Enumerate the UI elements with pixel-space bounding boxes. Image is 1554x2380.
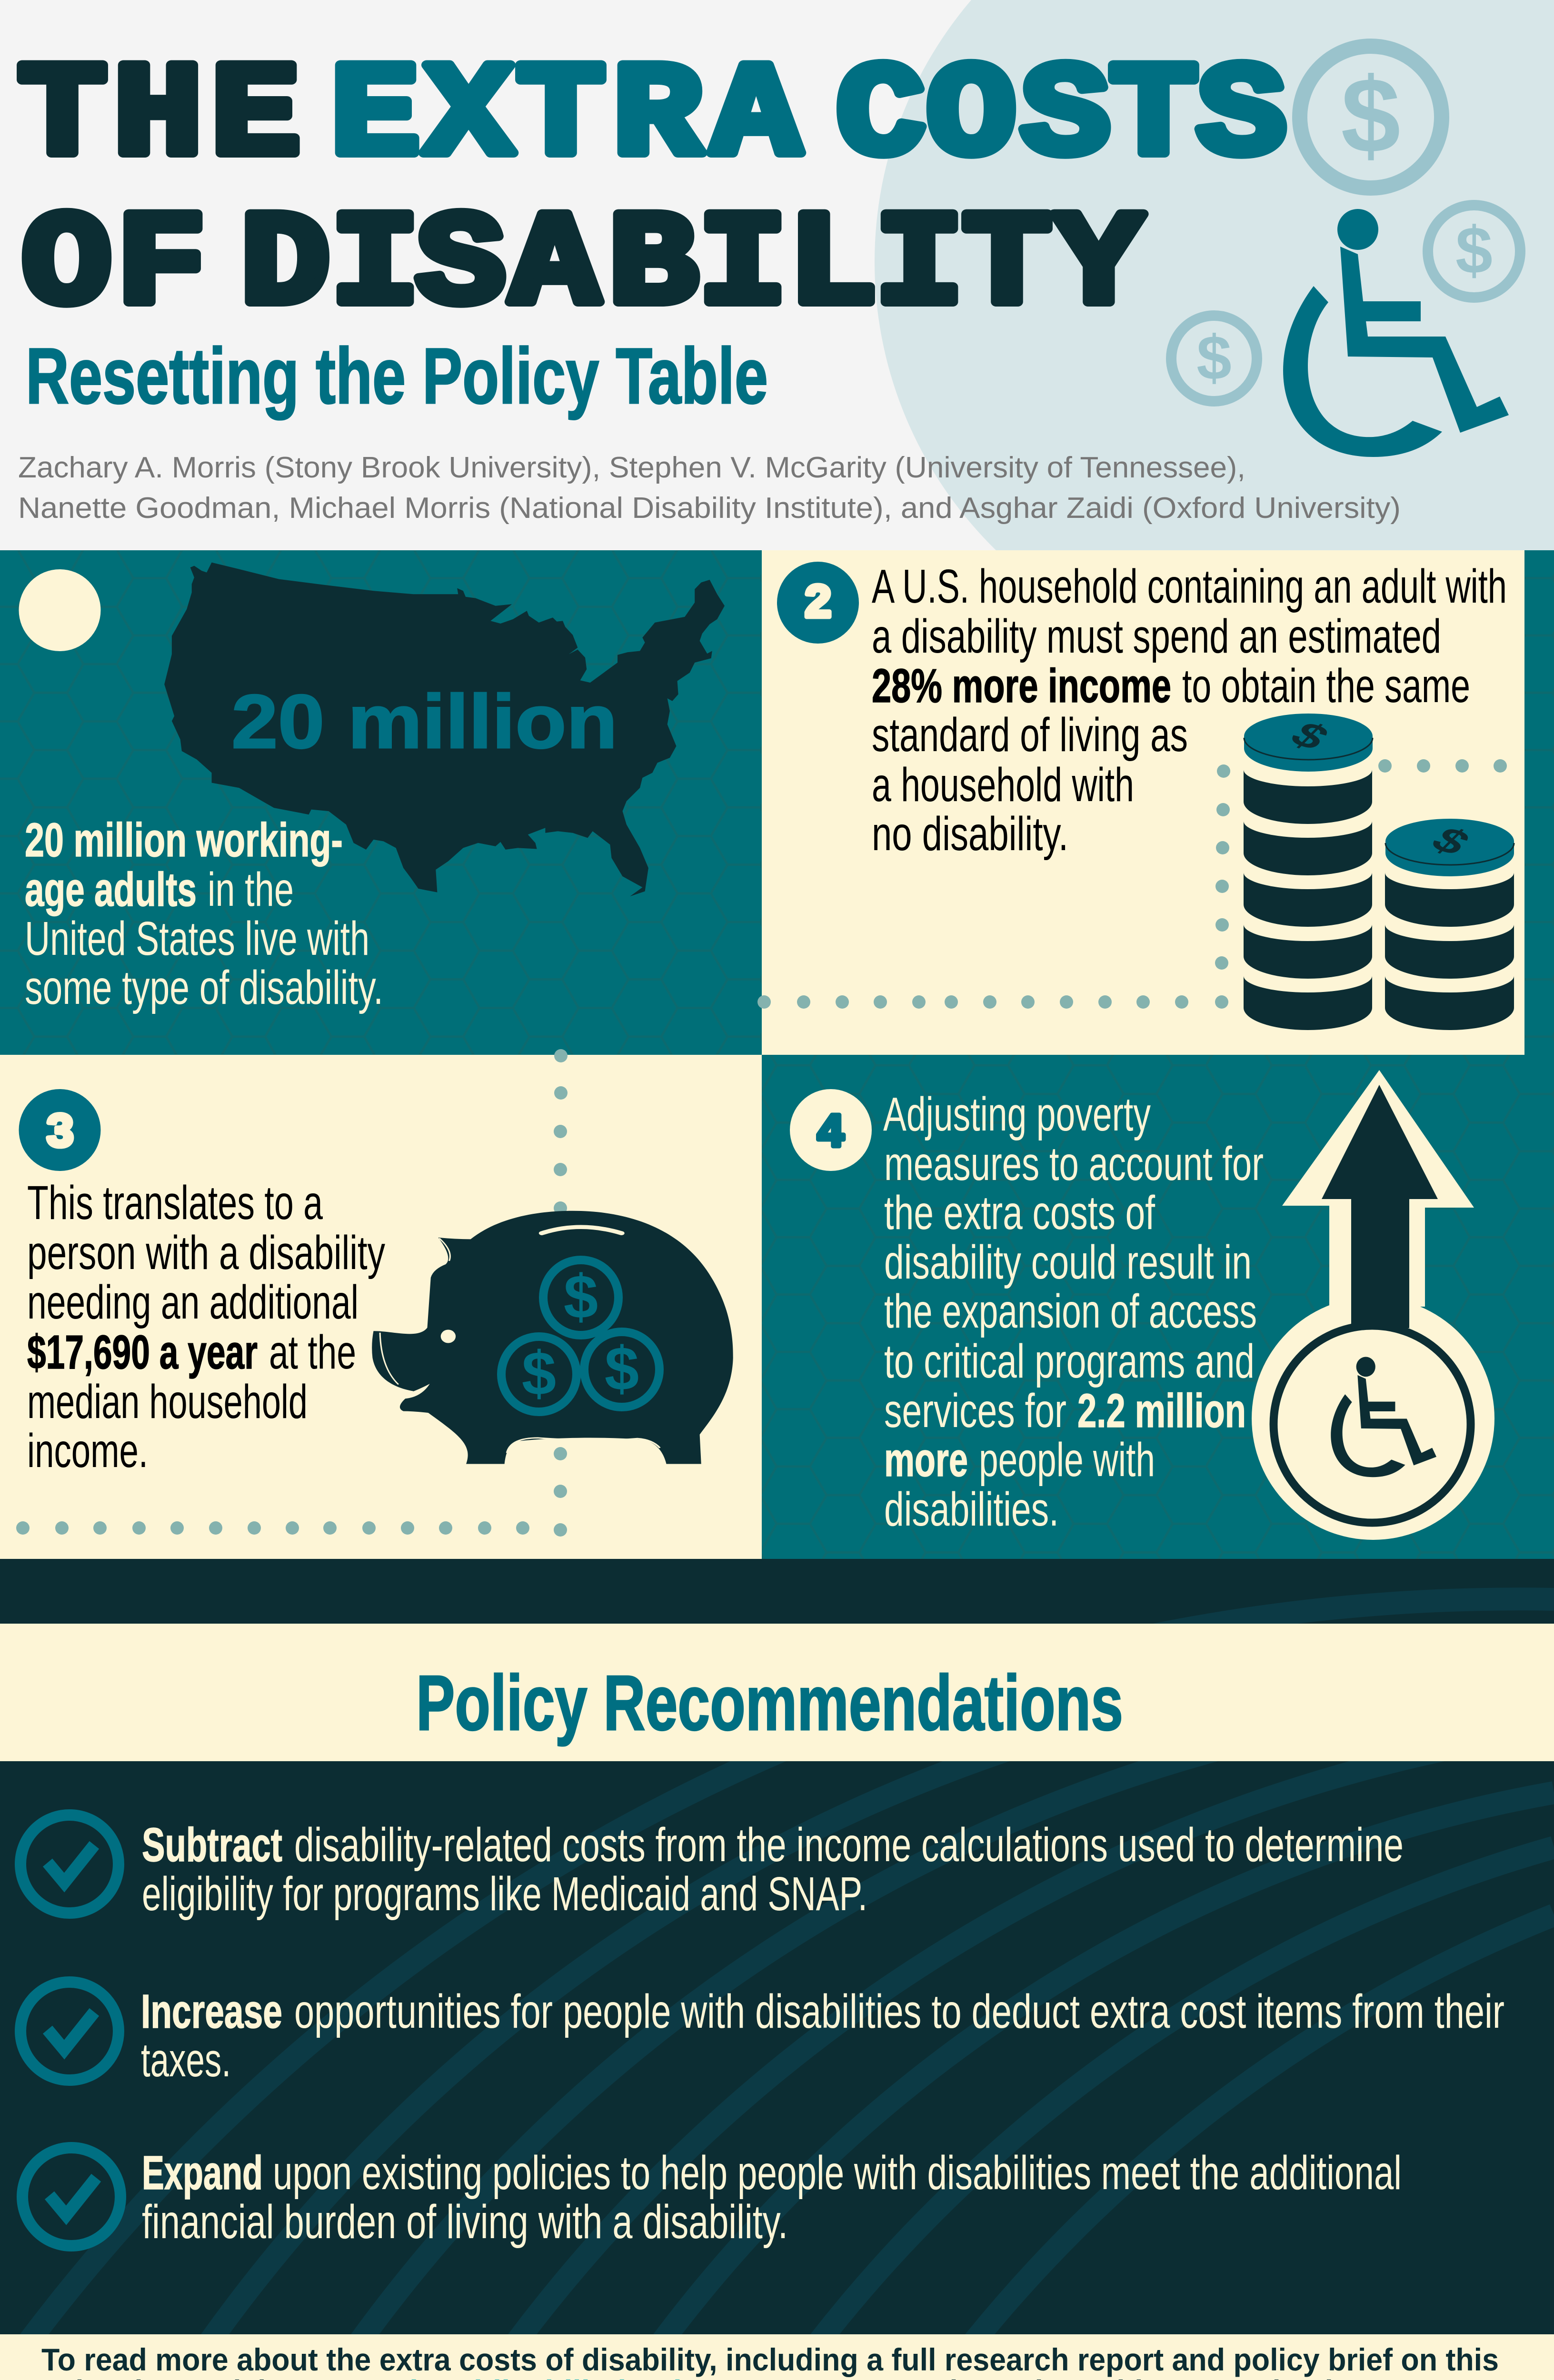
icon: tall coin stack xyxy=(1244,714,1373,1030)
panel 1 text: in the xyxy=(208,863,294,916)
panel 1 text: United States live with xyxy=(25,912,369,965)
panel 4 text: Adjusting poverty xyxy=(883,1088,1151,1141)
panel 4 text: services for xyxy=(884,1384,1066,1438)
icon: left dollar coin: $ xyxy=(1196,323,1232,393)
panel 3 text: at the xyxy=(269,1326,356,1379)
panel 3: $17,690 a year xyxy=(0,1049,762,1559)
panel 3 text: person with a disability xyxy=(27,1226,385,1279)
number badge 3 xyxy=(19,1089,101,1171)
header backdrop circle xyxy=(875,0,1554,550)
icon: check mark 3 xyxy=(22,2148,120,2246)
authors: Zachary A. Morris (Stony Brook University), Stephen V. McGarity (University of Tennessee), xyxy=(18,451,1245,484)
band: policy recommendations heading: Policy Recommendations xyxy=(416,1659,1123,1746)
panel 1 text xyxy=(25,813,383,1014)
band: policy recommendations heading xyxy=(0,1624,1554,1761)
map: United States silhouette xyxy=(164,563,725,896)
panel 3 text: income. xyxy=(27,1424,148,1478)
subtitle: Resetting the Policy Table xyxy=(26,332,768,420)
panel 2 text: no disability. xyxy=(872,807,1068,861)
icon: check mark 1 xyxy=(20,1815,119,1913)
icon: tall coin stack: $ xyxy=(1281,714,1339,757)
panel 4 text: disabilities. xyxy=(884,1483,1059,1536)
title xyxy=(18,42,1286,342)
panel 2 text: 28% more income xyxy=(872,659,1171,713)
panel 1 text: some type of disability. xyxy=(25,961,383,1014)
panel 4 text: disability could result in xyxy=(884,1236,1252,1289)
icon: piggy bank: $ xyxy=(605,1334,639,1403)
number badge 1 xyxy=(19,569,101,651)
title: EXTRA xyxy=(330,42,802,193)
panel 4: 2.2 million xyxy=(762,1055,1554,1559)
recommendation 3 xyxy=(22,2146,1402,2249)
panel 2 text xyxy=(872,560,1507,861)
recommendation 1: eligibility for programs like Medicaid and SNAP. xyxy=(142,1867,867,1921)
panel 4 text: people with xyxy=(979,1433,1155,1487)
panel 2 text: a household with xyxy=(872,758,1134,812)
icon: dollar coins and wheelchair xyxy=(1171,46,1520,457)
dotted line panel 2 xyxy=(757,759,1507,1009)
further reading text: To read more about the extra costs of disability, including a full research report and policy brief on this xyxy=(41,2342,1499,2377)
recommendation 1: Subtract xyxy=(142,1818,282,1872)
panel 4 text: to critical programs and xyxy=(884,1335,1255,1388)
number badge 3: 3 xyxy=(46,1107,74,1161)
number badge 2: 2 xyxy=(804,578,832,632)
recommendation 1 xyxy=(20,1815,1404,1921)
number badge 2 xyxy=(777,562,859,644)
number badge 4: 4 xyxy=(817,1107,845,1161)
icon: short coin stack: $ xyxy=(1422,820,1480,863)
icon: large dollar coin: $ xyxy=(1341,55,1401,175)
panel 2 text: standard of living as xyxy=(872,708,1188,762)
panel 1: 20 million xyxy=(0,550,762,1055)
panel 4 text: the extra costs of xyxy=(884,1186,1155,1240)
icon: wheelchair user small xyxy=(1331,1357,1436,1477)
recommendation 2 xyxy=(20,1982,1504,2087)
panel 4 text: 2.2 million xyxy=(1077,1384,1246,1438)
recommendation 3: Expand xyxy=(142,2146,263,2200)
panel 3 text: This translates to a xyxy=(27,1176,323,1230)
icon: piggy bank: $ xyxy=(564,1262,598,1331)
panel 3 text xyxy=(27,1176,385,1478)
title: COSTS xyxy=(836,42,1286,193)
recommendation 2: taxes. xyxy=(141,2033,231,2087)
panel: further reading and funding note xyxy=(0,2334,1554,2380)
icon: left dollar coin xyxy=(1171,316,1257,401)
panel 4 text: the expansion of access xyxy=(884,1285,1257,1338)
panel 4 text xyxy=(883,1088,1264,1536)
panel 3 text: $17,690 a year xyxy=(27,1326,258,1379)
icon: up arrow with wheelchair medallion xyxy=(1252,1070,1494,1540)
panel 1 text: 20 million working- xyxy=(25,813,343,867)
dark section with arcs xyxy=(0,1559,1554,2342)
dotted line panel 3 xyxy=(16,1049,568,1537)
icon: large dollar coin xyxy=(1300,46,1442,188)
panel 4 text: more xyxy=(884,1433,968,1487)
icon: piggy bank xyxy=(372,1211,733,1464)
map label: 20 million xyxy=(231,679,618,764)
recommendation 2: Increase xyxy=(141,1985,282,2038)
title: OF DISABILITY xyxy=(22,191,1145,342)
panel 3 text: median household xyxy=(27,1375,308,1428)
icon: wheelchair user xyxy=(1283,209,1509,457)
number badge 4 xyxy=(790,1089,872,1171)
icon: short coin stack xyxy=(1385,819,1514,1030)
authors: Nanette Goodman, Michael Morris (National Disability Institute), and Asghar Zaidi (Oxford University) xyxy=(18,492,1401,525)
authors xyxy=(18,451,1401,525)
recommendation 3: financial burden of living with a disability. xyxy=(142,2195,788,2249)
icon: piggy bank: $ xyxy=(522,1339,556,1408)
panel 2: 28% more income xyxy=(757,550,1524,1055)
icon: check mark 2 xyxy=(20,1982,119,2080)
icon: right dollar coin: $ xyxy=(1455,213,1493,288)
panel 4 text: measures to account for xyxy=(884,1137,1264,1190)
icon: right dollar coin xyxy=(1428,205,1520,298)
panel 4 strip to right of panel 2 xyxy=(1524,550,1554,1055)
panel 3 text: needing an additional xyxy=(27,1276,359,1329)
panel 1 text: age adults xyxy=(25,863,197,916)
title: THE xyxy=(18,42,300,193)
